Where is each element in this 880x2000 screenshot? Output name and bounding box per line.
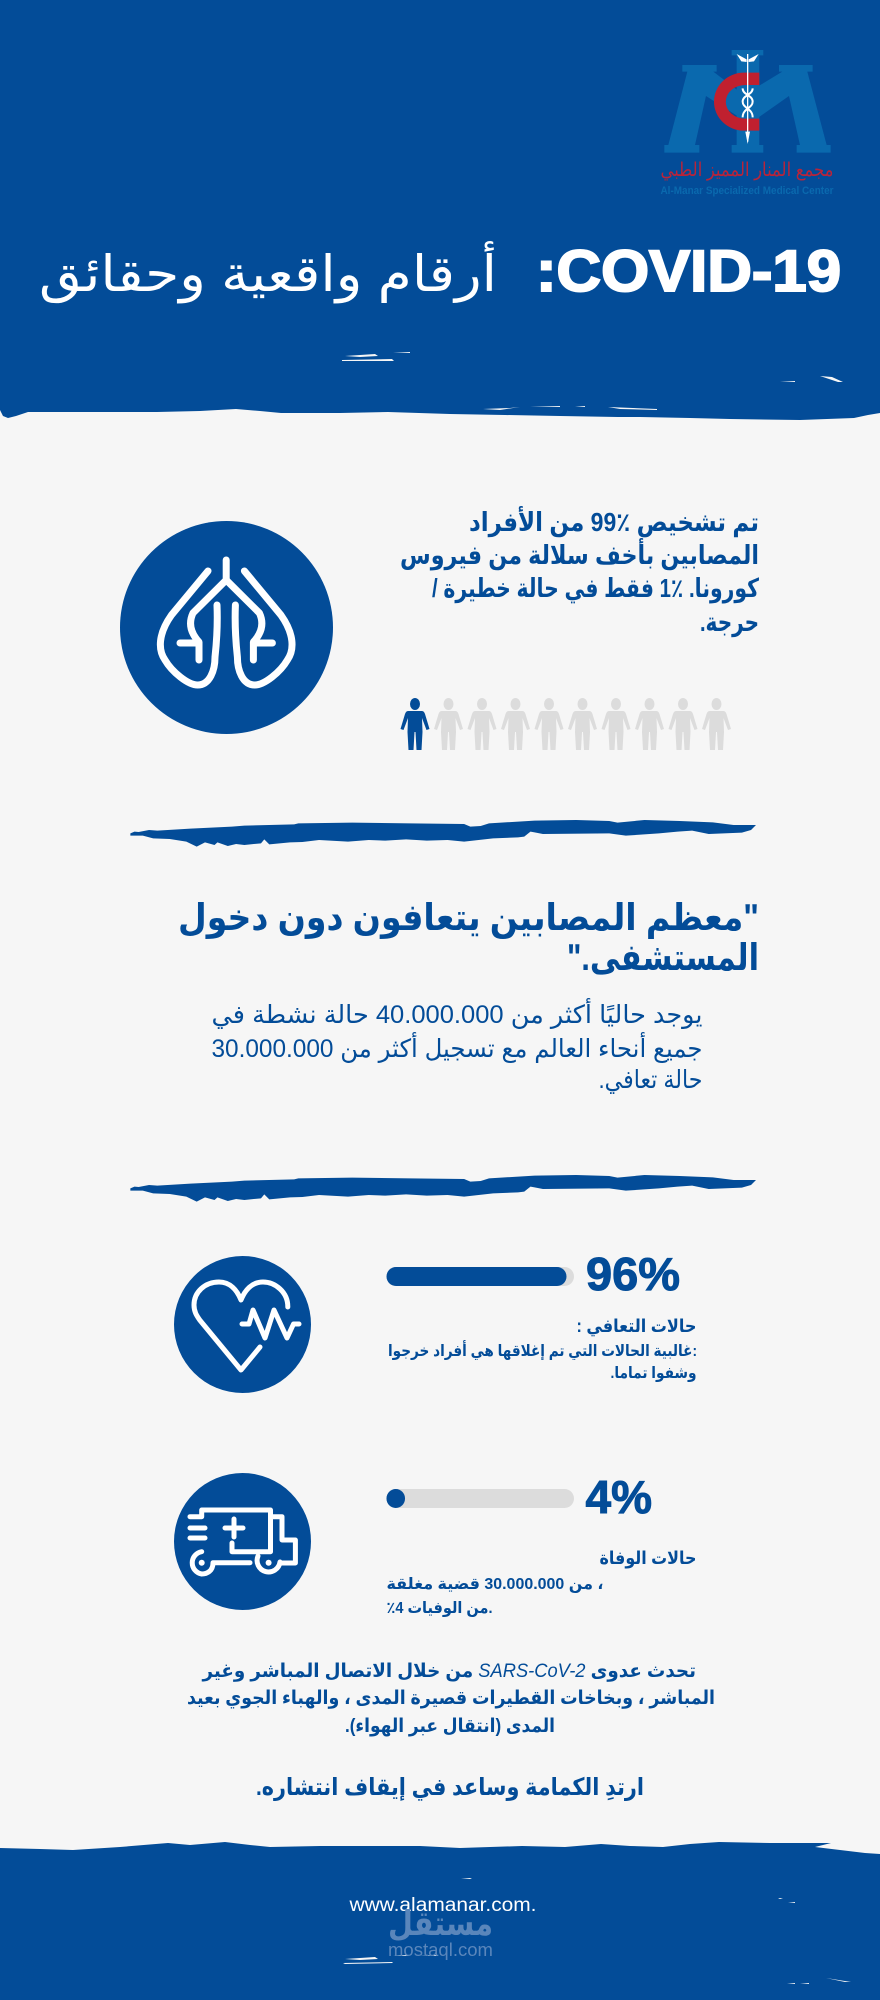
watermark bbox=[388, 1905, 493, 1960]
deaths text: حالات الوفاة bbox=[600, 1548, 696, 1569]
paragraph: transmission: المباشر ، وبخاخات القطيرات قصيرة المدى ، والهباء الجوي بعيد bbox=[187, 1688, 715, 1710]
recovery text: وشفوا تماما. bbox=[610, 1365, 696, 1382]
fact text: mild cases: حرجة. bbox=[700, 607, 759, 638]
stat: 4 percent: 4% bbox=[586, 1471, 652, 1523]
paragraph: active cases bbox=[211, 997, 703, 1094]
icon: lungs bbox=[120, 521, 333, 734]
paragraph: transmission: تحدث عدوى SARS-CoV-2 من خلال الاتصال المباشر وغير bbox=[202, 1661, 696, 1682]
stat: 96 percent: 96% bbox=[586, 1248, 680, 1300]
deaths text: .من الوفيات 4٪ bbox=[386, 1600, 492, 1617]
fact text: mild cases: تم تشخيص ٪99 من الأفراد bbox=[469, 506, 759, 538]
fact text: mild cases: المصابين بأخف سلالة من فيروس bbox=[400, 538, 759, 571]
logo english name: Al-Manar Specialized Medical Center bbox=[660, 185, 834, 197]
fact text: mild cases bbox=[400, 506, 760, 638]
quote heading bbox=[178, 897, 759, 978]
quote heading: "معظم المصابين يتعافون دون دخول bbox=[178, 897, 759, 939]
bar: deaths 4 percent bbox=[386, 1489, 574, 1508]
logo arabic name: مجمع المنار المميز الطبي bbox=[660, 160, 833, 181]
call to action: ارتدِ الكمامة وساعد في إيقاف انتشاره. bbox=[256, 1774, 644, 1801]
paragraph: active cases: جميع أنحاء العالم مع تسجيل أكثر من 30.000.000 bbox=[211, 1031, 702, 1064]
watermark: مستقل bbox=[388, 1905, 493, 1943]
footer panel bbox=[0, 1842, 880, 2000]
quote heading: المستشفى." bbox=[567, 937, 759, 978]
icon: heart with pulse bbox=[174, 1256, 311, 1393]
logo bbox=[660, 50, 833, 181]
paragraph: transmission: المدى (انتقال عبر الهواء). bbox=[345, 1716, 555, 1737]
fact text: mild cases: كورونا. ٪1 فقط في حالة خطيرة / bbox=[432, 573, 760, 604]
title latin: :COVID-19 bbox=[536, 239, 841, 304]
deaths text bbox=[386, 1548, 696, 1617]
recovery text: حالات التعافي : bbox=[576, 1316, 696, 1337]
watermark: mostaql.com bbox=[388, 1940, 493, 1960]
bar: recovery 96 percent bbox=[386, 1267, 574, 1286]
paragraph: active cases: يوجد حاليًا أكثر من 40.000.000 حالة نشطة في bbox=[212, 997, 703, 1029]
paragraph: active cases: حالة تعافي. bbox=[598, 1066, 702, 1094]
pictogram: one in ten people bbox=[400, 698, 731, 750]
recovery text: :غالبية الحالات التي تم إغلاقها هي أفراد خرجوا bbox=[388, 1340, 697, 1361]
recovery text bbox=[388, 1316, 697, 1382]
title arabic: أرقام واقعية وحقائق bbox=[39, 241, 497, 304]
paragraph: transmission bbox=[187, 1661, 715, 1737]
icon: ambulance bbox=[174, 1473, 311, 1610]
website: www.alamanar.com. bbox=[348, 1895, 536, 1916]
deaths text: ، من 30.000.000 قضية مغلقة bbox=[386, 1576, 604, 1593]
header panel bbox=[0, 0, 880, 420]
